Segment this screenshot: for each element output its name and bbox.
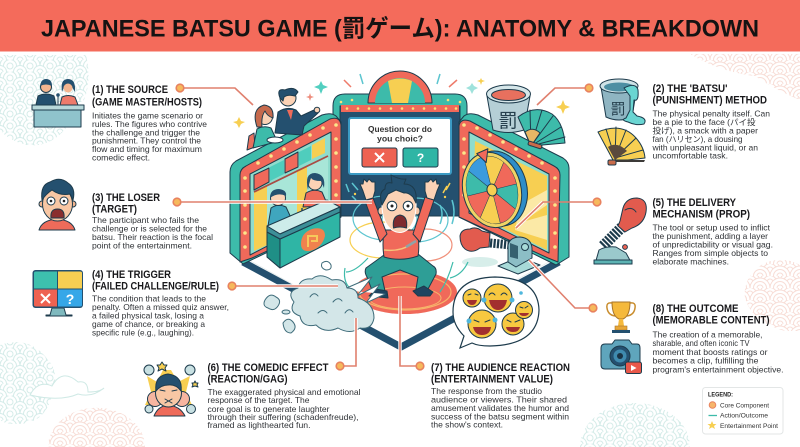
punishment bucket: 罰 — [498, 106, 518, 133]
icon: water bucket: 罰 — [610, 98, 626, 119]
heading — [431, 362, 570, 386]
contestant — [360, 175, 440, 298]
heading: (TARGET) — [92, 204, 137, 216]
body text: flow and timing for maximum — [92, 145, 202, 154]
icon: shocked face — [39, 179, 76, 230]
body text: Ranges from simple objects to — [652, 249, 768, 258]
icon: quiz monitor: ? — [66, 291, 74, 307]
right wall set — [459, 114, 569, 265]
studio floor — [243, 212, 559, 347]
body text: the punishment, adding a layer — [652, 232, 768, 241]
boxing glove machine — [460, 228, 540, 274]
body text: The tool or setup used to inflict — [652, 224, 771, 233]
body text — [92, 112, 207, 163]
body text: moment that boosts ratings or — [652, 348, 768, 357]
body text: The condition that leads to the — [92, 294, 206, 304]
body text — [208, 388, 361, 430]
heading — [208, 362, 329, 386]
screen sparkles — [346, 183, 454, 224]
heading: (3) THE LOSER — [92, 192, 160, 204]
panel: (3) the loser — [39, 179, 213, 250]
body text: batsu. Their reaction is the focal — [92, 233, 213, 242]
legend — [702, 388, 783, 434]
body text: rules. The figures who contrive — [92, 120, 207, 129]
body text: audience or viewers. Their shared — [431, 396, 567, 405]
body text: specific rule (e.g., laughing). — [92, 328, 194, 338]
body text — [652, 331, 784, 374]
icon: puffed cheeks face — [144, 362, 198, 416]
teal folding fan — [518, 110, 565, 149]
heading: (REACTION/GAG) — [208, 374, 288, 386]
body text: program's entertainment objective. — [652, 366, 784, 374]
body text: core goal is to generate laughter — [208, 405, 330, 414]
left wall set — [230, 114, 341, 264]
legend: entertainment point: Entertainment Point — [720, 423, 778, 430]
panel: (5) the delivery mechanism — [594, 197, 773, 266]
floor rug — [353, 270, 457, 314]
heading: (ENTERTAINMENT VALUE) — [431, 374, 553, 386]
body text: challenge or is selected for the — [92, 225, 207, 234]
body text — [652, 224, 773, 266]
audience speech bubble with laughing faces — [453, 277, 539, 348]
body text: of unpredictability or visual gag. — [652, 240, 773, 250]
centre screen — [333, 71, 467, 224]
heading: (PUNISHMENT) METHOD — [652, 94, 767, 106]
body text: game of chance, or breaking a — [92, 320, 205, 329]
icon: trophy — [607, 302, 635, 333]
body text — [92, 216, 213, 250]
icon: yellow fan — [598, 127, 645, 165]
title banner — [0, 0, 800, 52]
body text: the show's context. — [431, 421, 503, 430]
hosts on wall — [247, 88, 320, 150]
sparkles — [233, 74, 570, 128]
heading: (7) THE AUDIENCE REACTION — [431, 362, 570, 374]
legend: LEGEND: — [708, 392, 733, 398]
body text: a failed physical task, losing a — [92, 312, 204, 320]
title: JAPANESE BATSU GAME (罰ゲーム): ANATOMY & BREAKDOWN — [41, 16, 759, 42]
screen question: Question cor do — [368, 125, 432, 134]
body text: framed as lighthearted fun. — [208, 421, 310, 430]
legend: action/outcome: Action/Outcome — [720, 412, 768, 420]
icon: water bucket — [600, 79, 645, 125]
heading: MECHANISM (PROP) — [652, 208, 750, 220]
connector lines — [173, 84, 601, 370]
heading — [92, 269, 219, 292]
body text: penalty. Often a missed quiz answer, — [92, 303, 229, 312]
body text: elaborate machines. — [652, 258, 729, 266]
body text: The response from the studio — [431, 387, 542, 396]
legend: core component: Core Component — [720, 402, 769, 410]
red cross button — [362, 148, 397, 167]
heading: (2) THE 'BATSU' — [652, 83, 728, 95]
body text: through their suffering (schadenfreude), — [208, 413, 358, 422]
centre screen: you choic? — [377, 134, 423, 144]
body text: comedic effect. — [92, 154, 150, 163]
body text: the challenge and trigger the — [92, 128, 200, 137]
icon: quiz monitor — [32, 270, 83, 316]
panel: (1) the source — [32, 79, 207, 163]
heading: (4) THE TRIGGER — [92, 269, 171, 281]
body text: uncomfortable task. — [652, 152, 728, 161]
body text: with unpleasant liquid, or an — [651, 143, 758, 152]
dust cloud — [264, 261, 385, 333]
heading: (8) THE OUTCOME — [652, 303, 738, 315]
body text: fan (ハリセン), a dousing — [652, 135, 743, 144]
heading: (1) THE SOURCE — [92, 84, 168, 96]
body text: The physical penalty itself. Can — [652, 110, 770, 119]
icon: camera — [601, 340, 642, 374]
body text — [92, 294, 229, 338]
heading — [92, 84, 202, 108]
heading — [652, 197, 750, 220]
punishment bucket — [486, 85, 530, 133]
body text: becomes a clip, fulfilling the — [652, 357, 759, 366]
icon: hosts at desk — [32, 79, 84, 127]
body text: success of the batsu segment within — [431, 412, 569, 421]
body text — [431, 387, 569, 430]
heading: (GAME MASTER/HOSTS) — [92, 96, 202, 108]
body text: response of the target. The — [208, 396, 310, 405]
inner contestants and desk — [267, 173, 340, 268]
body text: punishment. They control the — [92, 137, 201, 146]
body text: The participant who fails the — [92, 216, 199, 225]
panel: (2) the batsu method — [598, 79, 770, 165]
prize wheel — [454, 142, 535, 234]
panel: (6) the comedic effect — [144, 362, 361, 430]
heading — [92, 192, 160, 216]
body text: point of the entertainment. — [92, 242, 192, 250]
body text: amusement validates the humor and — [431, 404, 569, 413]
motion swirls — [344, 196, 468, 292]
body text: The exaggerated physical and emotional — [208, 388, 361, 397]
heading: (5) THE DELIVERY — [652, 197, 737, 209]
heading: (MEMORABLE CONTENT) — [652, 314, 770, 326]
central illustration: game show set — [230, 71, 570, 348]
heading — [652, 83, 767, 106]
panel: (7) the audience reaction — [431, 362, 570, 430]
heading: (6) THE COMEDIC EFFECT — [208, 362, 329, 374]
panel: (4) the trigger — [32, 269, 229, 338]
heading — [652, 303, 770, 326]
body text: 投げ), a smack with a paper — [652, 125, 758, 135]
body text: Initiates the game scenario or — [92, 112, 203, 121]
body text: sharable, and often iconic TV — [652, 339, 750, 348]
panel: (8) the outcome — [601, 302, 784, 374]
icon: spring boxing glove — [594, 198, 646, 264]
heading: (FAILED CHALLENGE/RULE) — [92, 280, 219, 292]
body text: The creation of a memorable, — [652, 331, 762, 340]
body text — [651, 110, 770, 161]
teal question button — [403, 148, 438, 167]
body text: be a pie to the face (パイ投 — [652, 117, 756, 127]
teal question button: ? — [417, 151, 424, 165]
